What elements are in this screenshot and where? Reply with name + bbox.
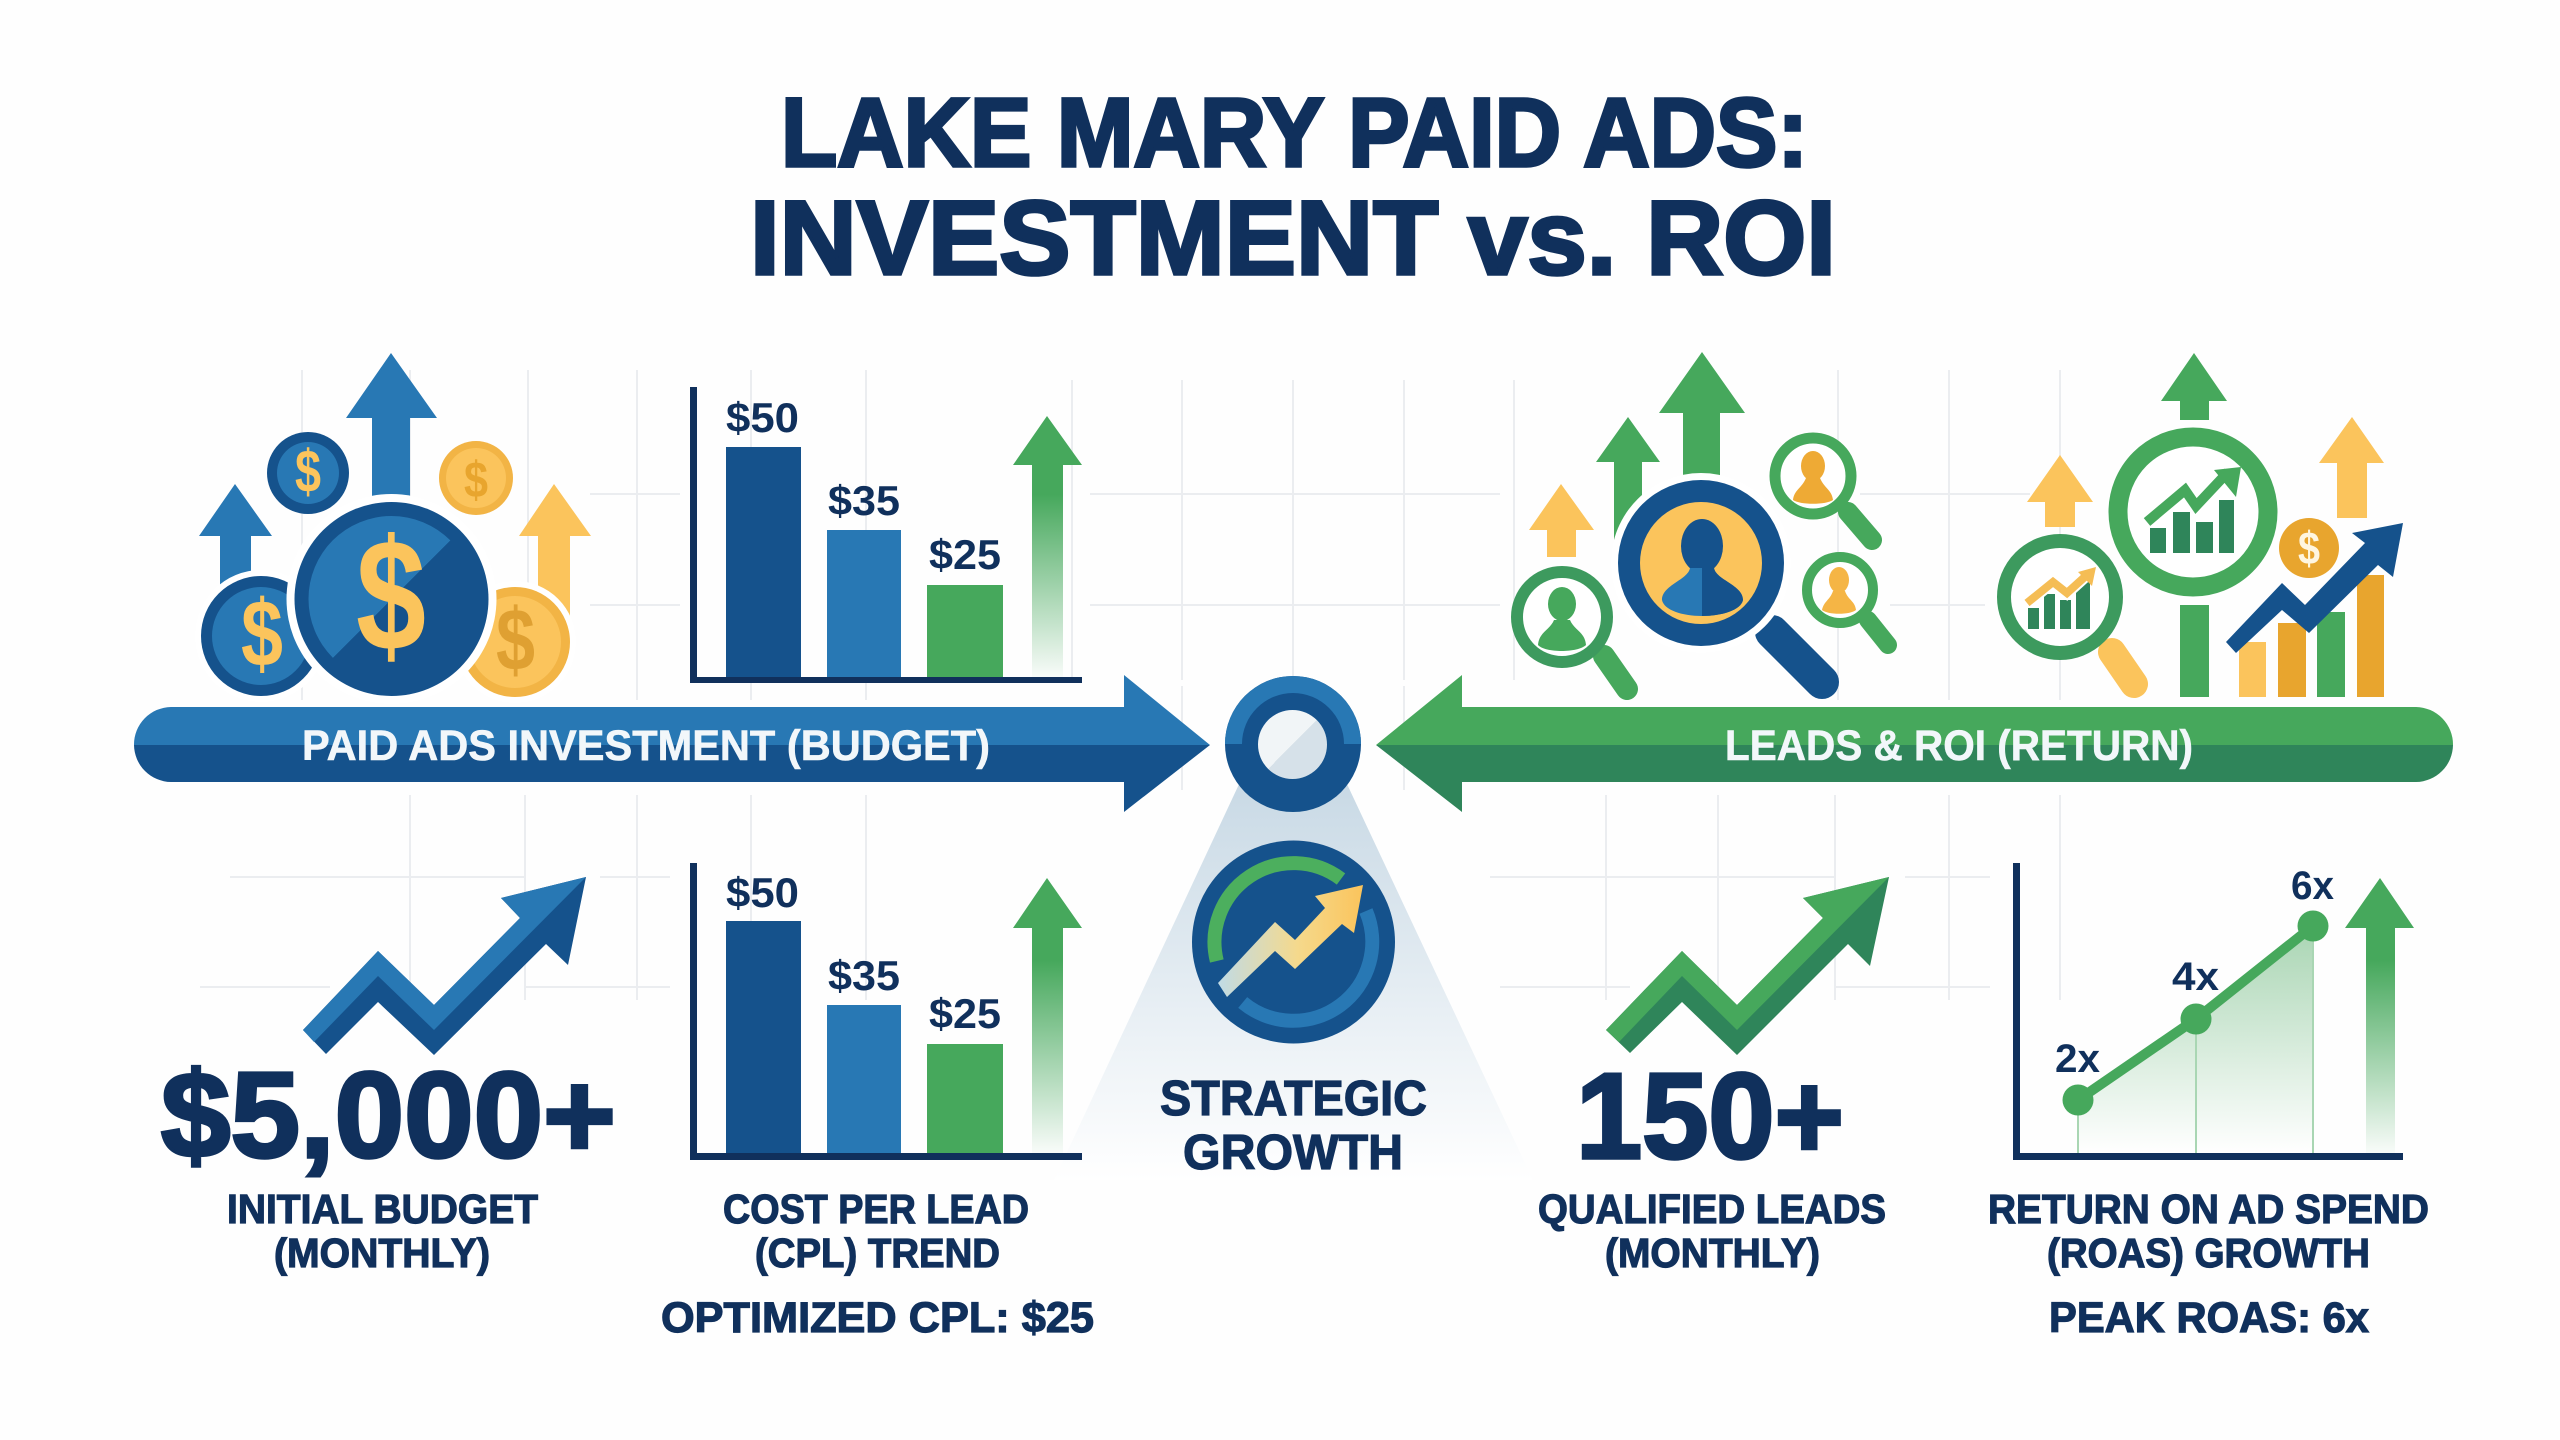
label: cost per lead trend: [661, 1186, 1094, 1342]
icon: green magnifier stem: [2180, 605, 2209, 697]
icon: top green arrow: [2161, 353, 2227, 420]
icon: right gold arrow: [2319, 417, 2384, 518]
label: strategic growth: GROWTH: [1183, 1126, 1403, 1180]
icon: blue trend arrow: [303, 877, 586, 1055]
icon: fading green arrow: [2345, 878, 2414, 1153]
stat: leads count: 150+: [1576, 1048, 1844, 1184]
icon: small blue coin: [267, 432, 349, 514]
icon: center ring: [1225, 676, 1361, 812]
icon: lower left blue coin: $: [241, 581, 283, 687]
line chart: return on ad spend: [2013, 863, 2414, 1160]
bar chart: lower cost per lead: $50: [726, 869, 799, 916]
bar chart: lower cost per lead: $35: [828, 952, 900, 999]
icon: lower left magnifier: [1517, 572, 1627, 689]
label: cost per lead trend: OPTIMIZED CPL: $25: [661, 1294, 1094, 1342]
icon: large dollar coin: $: [356, 506, 426, 684]
panel: leads icon, magnifiers and arrows: [1517, 352, 1888, 689]
title: LAKE MARY PAID ADS:: [781, 78, 1808, 187]
label: qualified leads: (MONTHLY): [1605, 1230, 1820, 1276]
icon: small gold coin: [439, 441, 513, 515]
icon: tall green arrow: [1659, 352, 1745, 490]
icon: small blue coin: $: [295, 438, 321, 505]
icon: lower right magnifier: [1807, 557, 1888, 645]
arrow band: leads and ROI: LEADS & ROI (RETURN): [1725, 722, 2193, 770]
icon: small gold coin: $: [464, 451, 488, 508]
bar chart: upper cost per lead: $50: [726, 394, 799, 441]
bar chart: upper cost per lead: $35: [828, 477, 900, 524]
line chart: return on ad spend: 4x: [2172, 955, 2219, 999]
label: initial budget: INITIAL BUDGET: [227, 1186, 538, 1232]
icon: left gold arrow: [2027, 455, 2093, 527]
icon: second green arrow: [1596, 417, 1660, 540]
icon: large magnifier with person: [1611, 473, 1822, 682]
panel: qualified leads: [1538, 877, 1889, 1276]
icon: growth badge: [1192, 840, 1395, 1044]
arrow band: paid ads investment: PAID ADS INVESTMENT (BUDGET): [302, 722, 990, 770]
icon: right gold arrow: [519, 484, 591, 620]
label: initial budget: [227, 1186, 538, 1276]
title: INVESTMENT vs. ROI: [750, 180, 1836, 297]
label: initial budget: (MONTHLY): [274, 1230, 490, 1276]
label: cost per lead trend: (CPL) TREND: [755, 1230, 1000, 1276]
icon: green trend arrow: [1606, 877, 1889, 1055]
icon: gold and green bars: [2239, 575, 2384, 697]
icon: dollar coin: $: [2298, 522, 2320, 574]
icon: large green magnifier with chart: [2118, 437, 2268, 587]
icon: lower right gold coin: [454, 581, 576, 703]
panel: investment icon, coins and arrows: [195, 353, 591, 704]
icon: lower right gold coin: $: [496, 590, 535, 689]
label: strategic growth: STRATEGIC: [1160, 1072, 1427, 1126]
stat: budget amount: $5,000+: [161, 1047, 616, 1183]
panel: ROI icon, magnifiers and charts: [2004, 353, 2403, 697]
icon: left magnifier with chart: [2004, 541, 2134, 684]
label: qualified leads: QUALIFIED LEADS: [1538, 1186, 1886, 1232]
light triangular beam: [1054, 750, 1533, 1180]
icon: tall blue arrow: [346, 353, 437, 510]
label: strategic growth: [1160, 1072, 1427, 1180]
bar chart: upper cost per lead: $25: [929, 531, 1001, 578]
bar chart: lower cost per lead: [690, 863, 1082, 1160]
icon: left blue arrow: [199, 484, 272, 590]
bar chart: upper cost per lead: [690, 387, 1082, 683]
panel: strategic growth funnel: [1054, 676, 1533, 1180]
label: cost per lead trend: COST PER LEAD: [723, 1186, 1029, 1232]
icon: dollar coin: [2279, 518, 2339, 578]
icon: fading green arrow: [1013, 878, 1082, 1153]
label: qualified leads: [1538, 1186, 1886, 1276]
icon: large dollar coin: [286, 494, 496, 704]
arrow band: paid ads investment: [134, 675, 1210, 812]
bar chart: lower cost per lead: $25: [929, 990, 1001, 1037]
icon: fading green arrow: [1013, 416, 1082, 677]
line chart: return on ad spend: 2x: [2055, 1037, 2100, 1081]
icon: navy trend arrow: [2226, 523, 2403, 653]
label: return on ad spend: (ROAS) GROWTH: [2047, 1230, 2370, 1276]
title: [750, 78, 1836, 297]
line chart: return on ad spend: 6x: [2291, 864, 2334, 908]
panel: initial budget: [161, 877, 616, 1276]
label: return on ad spend: PEAK ROAS: 6x: [2049, 1294, 2369, 1342]
icon: lower left blue coin: [195, 570, 327, 702]
icon: gold arrow: [1529, 484, 1594, 557]
label: return on ad spend: RETURN ON AD SPEND: [1988, 1186, 2429, 1232]
icon: upper right magnifier: [1775, 438, 1872, 540]
arrow band: leads and ROI: [1376, 675, 2453, 812]
label: return on ad spend: [1988, 1186, 2429, 1342]
